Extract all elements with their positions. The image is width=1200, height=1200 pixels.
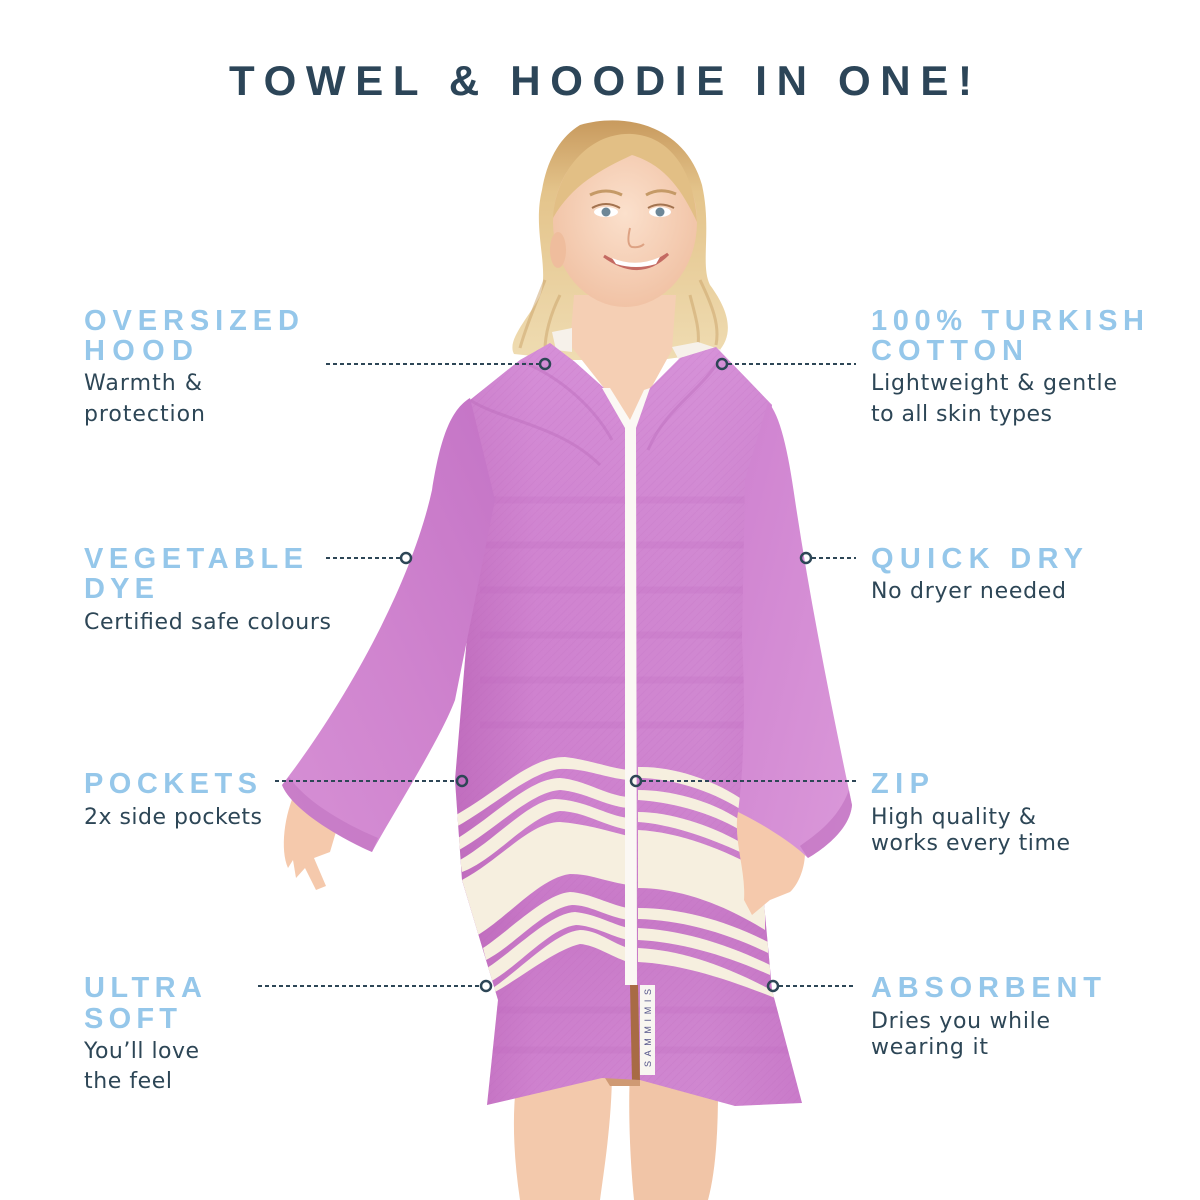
callout: vegetable dye: DYE xyxy=(84,573,154,605)
eyes xyxy=(590,191,676,217)
body slit shadow xyxy=(630,985,640,1082)
sewn label xyxy=(640,985,655,1075)
legs xyxy=(514,1070,718,1200)
callout: quick dry: QUICK DRY xyxy=(871,543,1083,575)
callout: zip: High quality & xyxy=(871,805,1036,830)
callout: absorbent: Dries you while xyxy=(871,1009,1050,1034)
callout: 100% turkish cotton: Lightweight & gentle xyxy=(871,371,1117,396)
fringe xyxy=(553,134,697,222)
callout: pockets: POCKETS xyxy=(84,768,257,800)
callout: pockets xyxy=(84,768,467,830)
callout: 100% turkish cotton: to all skin types xyxy=(871,402,1052,427)
title: TOWEL & HOODIE IN ONE! xyxy=(229,57,972,104)
stripes right panel xyxy=(638,767,775,998)
zip xyxy=(602,388,650,985)
callout: zip: works every time xyxy=(871,831,1070,856)
callout: zip: ZIP xyxy=(871,768,929,800)
callout: quick dry xyxy=(801,543,1083,604)
left sleeve xyxy=(282,398,495,852)
callout: absorbent xyxy=(768,972,1101,1060)
callout: ultra soft: ULTRA xyxy=(84,972,202,1004)
callout: pockets: 2x side pockets xyxy=(84,805,262,830)
horizontal weave bands xyxy=(480,500,800,1050)
callout: vegetable dye: Certified safe colours xyxy=(84,610,331,635)
sewn label: SAMMIMIS xyxy=(643,989,653,1067)
callout: oversized hood xyxy=(84,305,550,427)
right hand xyxy=(737,812,805,915)
callout: oversized hood: Warmth & xyxy=(84,371,202,396)
neck xyxy=(570,295,676,428)
callout: oversized hood: HOOD xyxy=(84,335,193,367)
hood folds xyxy=(470,362,716,465)
callout: vegetable dye xyxy=(84,543,411,635)
callout: 100% turkish cotton: COTTON xyxy=(871,335,1023,367)
robe body with stripes xyxy=(455,343,802,1106)
callout: quick dry: No dryer needed xyxy=(871,579,1066,604)
ear xyxy=(550,232,566,268)
callout: absorbent: wearing it xyxy=(871,1035,988,1060)
stripes left panel xyxy=(456,757,628,992)
callout: ultra soft: You’ll love xyxy=(83,1039,199,1064)
hair xyxy=(512,120,728,360)
hood lining xyxy=(552,328,722,362)
callout: ultra soft: the feel xyxy=(84,1069,172,1094)
callout: oversized hood: OVERSIZED xyxy=(84,305,299,337)
callout: zip xyxy=(631,768,1070,856)
callout: ultra soft xyxy=(83,972,491,1094)
nose and smile xyxy=(604,228,668,269)
callout: 100% turkish cotton xyxy=(717,305,1144,427)
callout: oversized hood: protection xyxy=(84,402,205,427)
right sleeve xyxy=(738,402,852,858)
illustration: child wearing hooded towel robe xyxy=(282,120,852,1200)
left hand xyxy=(284,790,340,890)
callout: vegetable dye: VEGETABLE xyxy=(84,543,303,575)
callout: absorbent: ABSORBENT xyxy=(871,972,1101,1004)
callout: ultra soft: SOFT xyxy=(84,1003,177,1035)
callout: 100% turkish cotton: 100% TURKISH xyxy=(871,305,1144,337)
face xyxy=(553,137,697,307)
